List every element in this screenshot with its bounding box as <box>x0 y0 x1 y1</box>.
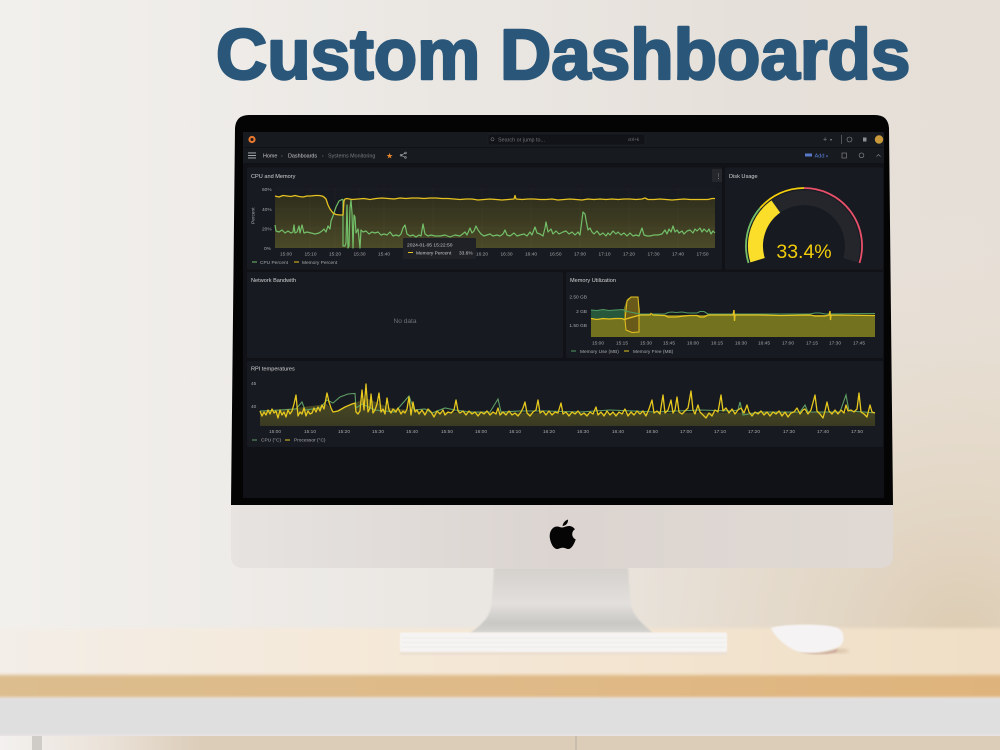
add button <box>805 153 828 160</box>
x axis labels: 17:30 <box>783 429 795 435</box>
memory free line <box>591 310 875 321</box>
nav icons <box>823 135 883 144</box>
x axis labels: 15:30 <box>353 252 366 258</box>
dashboard screen <box>243 132 884 498</box>
x axis labels: 17:20 <box>748 429 760 435</box>
x axis labels: 17:40 <box>672 252 684 258</box>
y axis: 40 <box>251 404 257 410</box>
x axis labels: 15:15 <box>616 340 628 346</box>
y axis: 2 GB <box>576 309 587 315</box>
panel: Disk Usage <box>725 168 883 270</box>
gauge <box>746 188 862 263</box>
panel: Memory Utilization <box>566 272 883 358</box>
panel: Disk Usage: Disk Usage <box>729 174 758 180</box>
x axis labels: 15:20 <box>338 429 350 435</box>
x axis labels: 17:00 <box>680 429 692 435</box>
x axis labels: 15:20 <box>329 252 341 258</box>
x axis labels: 15:10 <box>304 252 317 258</box>
cpu and memory chart <box>275 189 715 248</box>
x axis labels: 15:00 <box>280 252 292 258</box>
legend <box>252 260 338 266</box>
x axis labels: 16:20 <box>476 252 488 258</box>
x axis labels: 16:00 <box>687 340 699 346</box>
cpu percent line <box>275 200 715 248</box>
icon: grafana logo <box>248 136 256 143</box>
x axis labels: 16:45 <box>758 340 770 346</box>
y axis: Percent <box>250 207 256 224</box>
breadcrumb bar <box>243 148 884 163</box>
processor temperature line <box>260 384 875 418</box>
toolbar icons <box>842 153 880 158</box>
x axis labels: 15:00 <box>592 340 604 346</box>
y axis: 2.50 GB <box>569 294 587 300</box>
x axis labels: 17:00 <box>782 340 794 346</box>
breadcrumb bar: Home <box>263 154 277 160</box>
x axis labels: 17:40 <box>817 429 829 435</box>
legend: Processor (°C) <box>294 438 326 444</box>
nav icons: ▾ <box>830 137 832 142</box>
legend: CPU Percent <box>260 260 289 266</box>
x axis labels: 15:30 <box>372 429 384 435</box>
x axis labels: 17:30 <box>829 340 841 346</box>
y axis <box>250 187 272 252</box>
panel menu button: ⋮ <box>716 174 722 180</box>
x axis labels: 15:10 <box>304 429 316 435</box>
panel: Memory Utilization: Memory Utilization <box>570 278 616 284</box>
search box: ctrl+k <box>628 137 640 142</box>
keyboard <box>400 632 727 655</box>
panel menu button <box>712 169 722 182</box>
add button: Add <box>814 154 824 160</box>
y axis <box>251 381 257 410</box>
panel: Network Bandwidth: No data <box>393 318 417 325</box>
cpu temperature line <box>260 394 875 415</box>
y axis: 20% <box>262 226 272 232</box>
x axis labels: 17:10 <box>714 429 726 435</box>
x axis labels: 17:50 <box>851 429 863 435</box>
breadcrumb bar: › <box>322 154 324 160</box>
x axis labels: 17:50 <box>696 252 709 258</box>
desk <box>0 628 1000 750</box>
legend <box>252 438 326 444</box>
x axis labels: 16:00 <box>475 429 487 435</box>
monitor bezel <box>231 115 893 505</box>
x axis labels: 15:30 <box>640 340 652 346</box>
x axis labels: 16:10 <box>509 429 521 435</box>
y axis <box>569 294 587 329</box>
panel: CPU and Memory <box>247 168 722 270</box>
x axis labels: 17:45 <box>853 340 865 346</box>
x axis labels: 17:20 <box>623 252 635 258</box>
y axis: 40% <box>262 207 272 213</box>
monitor chin <box>231 505 893 568</box>
memory use line <box>591 310 875 314</box>
y axis: 0% <box>264 246 272 252</box>
x axis labels: 16:30 <box>577 429 589 435</box>
legend: CPU (°C) <box>261 438 281 444</box>
x axis labels: 16:30 <box>500 252 513 258</box>
icon: share <box>400 152 406 158</box>
panel: CPU and Memory: CPU and Memory <box>251 174 296 180</box>
y axis: 45 <box>251 381 257 387</box>
x axis labels: 15:00 <box>269 429 281 435</box>
breadcrumb bar: › <box>281 154 283 160</box>
nav icons: + <box>823 136 827 144</box>
memory percent line <box>275 196 715 215</box>
x axis labels: 16:50 <box>646 429 658 435</box>
search box: Search or jump to... <box>498 137 545 143</box>
x axis labels: 16:50 <box>549 252 562 258</box>
gauge value: 33.4% <box>776 241 832 263</box>
x axis labels: 16:30 <box>735 340 747 346</box>
legend: Memory Percent <box>302 260 338 266</box>
y axis: 1.50 GB <box>569 323 587 329</box>
x axis labels <box>269 429 863 435</box>
top navigation bar <box>243 132 884 147</box>
x axis labels: 15:40 <box>378 252 390 258</box>
x axis labels: 16:20 <box>543 429 555 435</box>
legend: Memory Use (MB) <box>580 349 619 355</box>
panel: Network Bandwidth <box>247 272 563 358</box>
tooltip: 33.6% <box>459 250 473 256</box>
mouse <box>771 625 849 654</box>
panel: RPI temperatures <box>247 361 883 447</box>
x axis labels: 16:40 <box>525 252 537 258</box>
memory chart <box>591 296 875 337</box>
x axis labels: 17:30 <box>647 252 660 258</box>
legend: Memory Free (MB) <box>633 349 674 355</box>
icon: menu <box>248 152 256 158</box>
x axis labels: 15:45 <box>663 340 675 346</box>
title: Custom Dashboards <box>216 16 910 95</box>
x axis labels: 17:00 <box>574 252 586 258</box>
add button: ▾ <box>826 153 828 158</box>
icon: apple logo <box>550 520 576 549</box>
x axis labels: 17:10 <box>598 252 611 258</box>
panel: Network Bandwidth: Network Bandwith <box>251 278 296 284</box>
tooltip: Memory Percent <box>416 250 452 256</box>
panel: RPI temperatures: RPI temperatures <box>251 366 295 372</box>
x axis labels: 16:15 <box>711 340 723 346</box>
tooltip: 2024-01-05 15:22:50 <box>407 242 453 248</box>
y axis: 60% <box>262 187 272 193</box>
x axis labels: 17:15 <box>806 340 818 346</box>
temperature chart <box>260 384 875 426</box>
x axis labels <box>280 252 709 258</box>
legend <box>571 349 674 355</box>
x axis labels: 15:40 <box>406 429 418 435</box>
breadcrumb bar: Dashboards <box>288 154 317 160</box>
x axis labels: 15:50 <box>441 429 453 435</box>
x axis labels <box>592 340 865 346</box>
icon: star: ★ <box>386 152 393 160</box>
search box <box>488 134 645 145</box>
monitor stand <box>470 568 653 633</box>
x axis labels: 16:40 <box>612 429 624 435</box>
breadcrumb bar: Systems Monitoring <box>328 154 375 160</box>
tooltip <box>403 238 476 259</box>
